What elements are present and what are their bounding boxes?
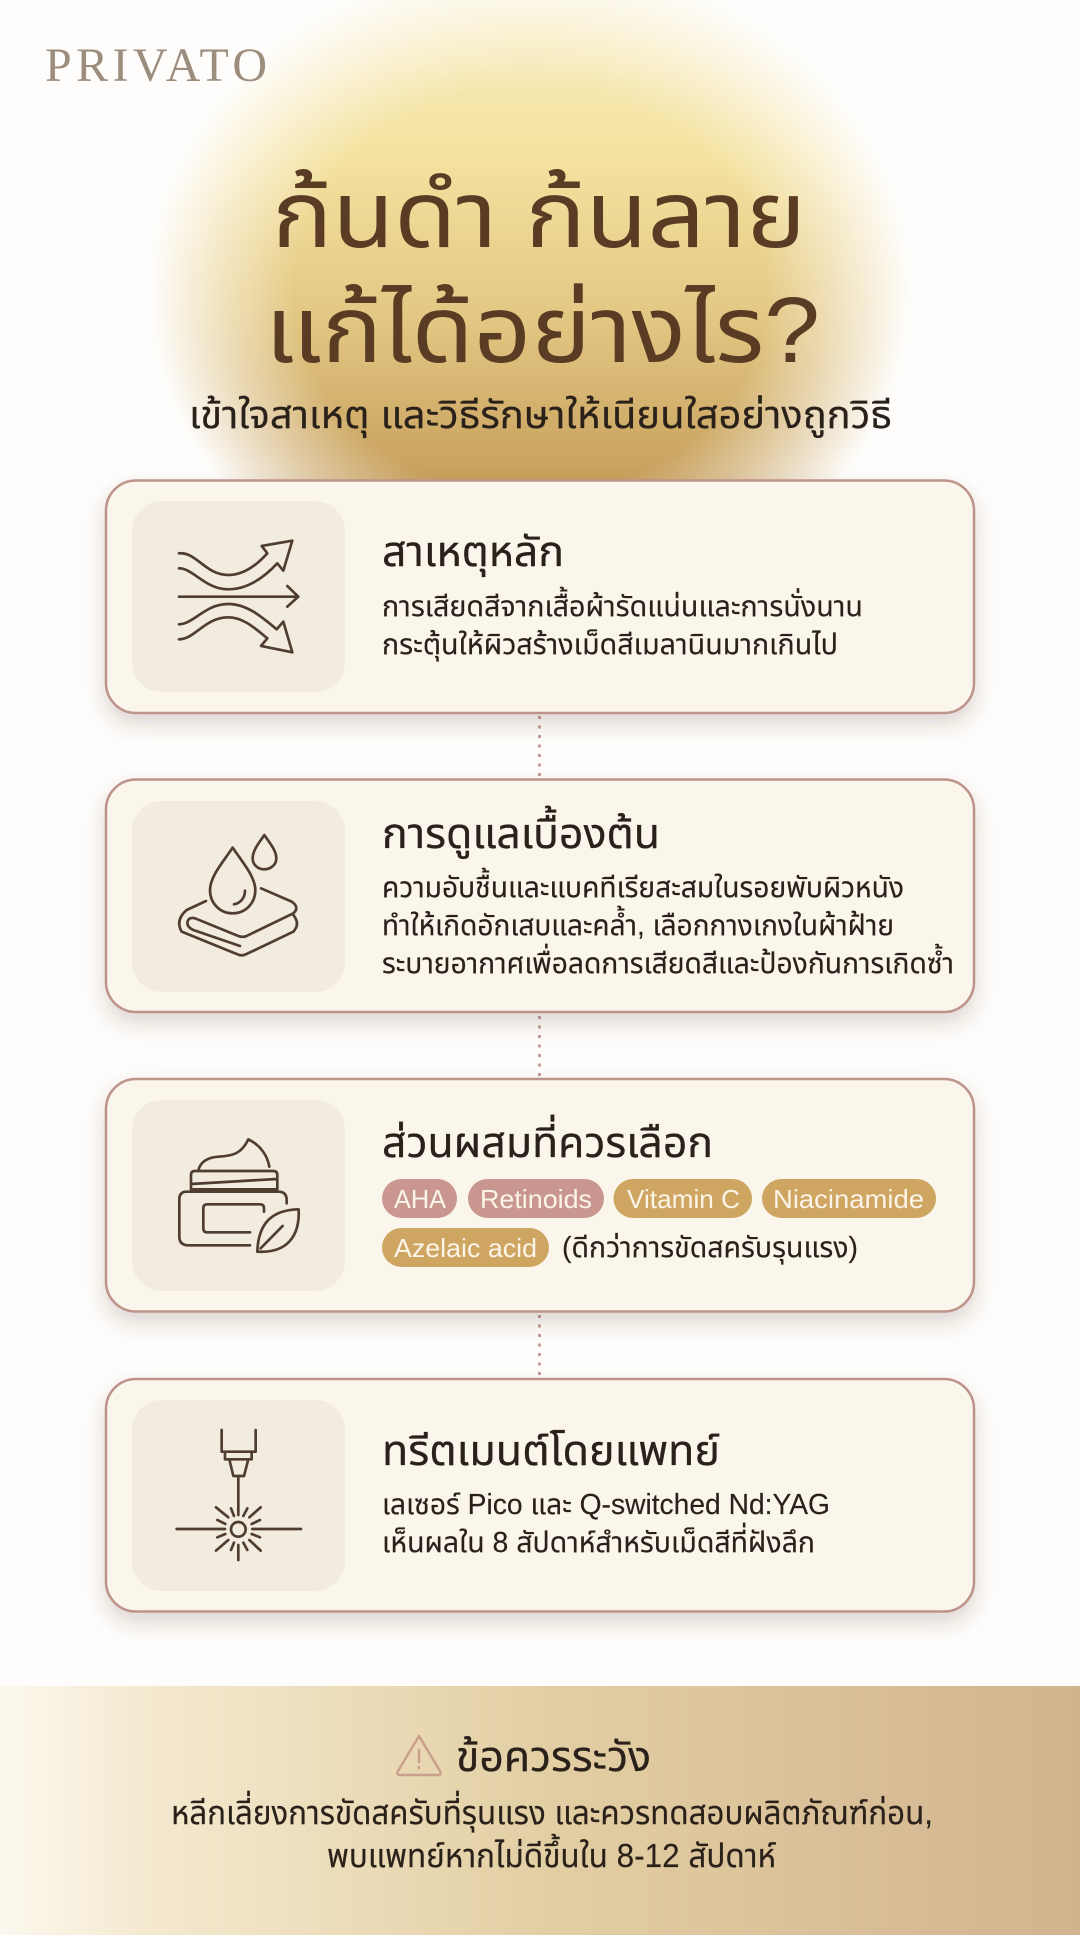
tag: Retinoids: [468, 1179, 604, 1218]
heading: การดูแลเบื้องต้น: [382, 805, 660, 859]
body text: [382, 867, 954, 980]
body text: [382, 1489, 830, 1559]
panel: main causes: [106, 480, 974, 713]
heading: ส่วนผสมที่ควรเลือก: [382, 1114, 713, 1166]
icon: warning triangle: [397, 1736, 441, 1775]
background glow: [160, 0, 900, 480]
logo: PRIVATO: PRIVATO: [45, 39, 267, 92]
body text: เลเซอร์ Pico และ Q-switched Nd:YAG: [382, 1489, 830, 1521]
icon: drops on towel: [179, 835, 297, 955]
icon box: [132, 1400, 345, 1591]
tag: Vitamin C: Vitamin C: [627, 1184, 740, 1214]
tag: Vitamin C: [614, 1179, 752, 1218]
icon box: [132, 801, 345, 992]
icon: cream jar with leaf: [179, 1139, 299, 1252]
tag: Azelaic acid: [382, 1228, 549, 1267]
heading: สาเหตุหลัก: [382, 528, 564, 577]
title: [265, 163, 820, 382]
body text: การเสียดสีจากเสื้อผ้ารัดแน่นและการนั่งนาน: [382, 586, 863, 623]
tag: Niacinamide: Niacinamide: [773, 1184, 924, 1214]
panel: first care: [106, 780, 974, 1012]
tag: AHA: [382, 1179, 457, 1218]
note: (ดีกว่าการขัดสครับรุนแรง): [562, 1232, 858, 1264]
heading: ข้อควรระวัง: [456, 1733, 651, 1780]
body text: กระตุ้นให้ผิวสร้างเม็ดสีเมลานินมากเกินไป: [382, 629, 838, 661]
icon: laser: [177, 1430, 301, 1560]
body text: ความอับชื้นและแบคทีเรียสะสมในรอยพับผิวหนัง: [382, 867, 904, 904]
connector: card 1 to 2: [538, 716, 541, 777]
heading: ทรีตเมนต์โดยแพทย์: [382, 1427, 720, 1474]
tag: AHA: AHA: [394, 1184, 447, 1214]
body text: ทำให้เกิดอักเสบและคล้ำ, เลือกกางเกงในผ้าฝ้าย: [382, 905, 894, 942]
title: ก้นดำ ก้นลาย: [272, 163, 806, 267]
body text: [382, 586, 863, 661]
tag: Azelaic acid: Azelaic acid: [394, 1233, 537, 1263]
icon box: [132, 501, 345, 692]
icon: converging arrows: [179, 541, 298, 652]
body text: เห็นผลใน 8 สัปดาห์สำหรับเม็ดสีที่ฝังลึก: [382, 1522, 815, 1559]
body text: พบแพทย์หากไม่ดีขึ้นใน 8-12 สัปดาห์: [327, 1833, 777, 1874]
icon box: [132, 1100, 345, 1291]
panel: warning banner: [0, 1686, 1080, 1935]
connector: card 2 to 3: [538, 1016, 541, 1076]
body text: ระบายอากาศเพื่อลดการเสียดสีและป้องกันการเกิดซ้ำ: [382, 943, 954, 980]
panel: medical treatment: [106, 1379, 974, 1612]
tag: Niacinamide: [762, 1179, 936, 1218]
body text: [171, 1790, 933, 1874]
subtitle: เข้าใจสาเหตุ และวิธีรักษาให้เนียนใสอย่างถูกวิธี: [189, 395, 892, 438]
panel: ingredients: [106, 1079, 974, 1312]
connector: card 3 to 4: [538, 1315, 541, 1376]
tag: Retinoids: Retinoids: [480, 1184, 592, 1214]
body text: หลีกเลี่ยงการขัดสครับที่รุนแรง และควรทดสอบผลิตภัณฑ์ก่อน,: [171, 1790, 933, 1833]
title: แก้ได้อย่างไร?: [265, 278, 820, 382]
